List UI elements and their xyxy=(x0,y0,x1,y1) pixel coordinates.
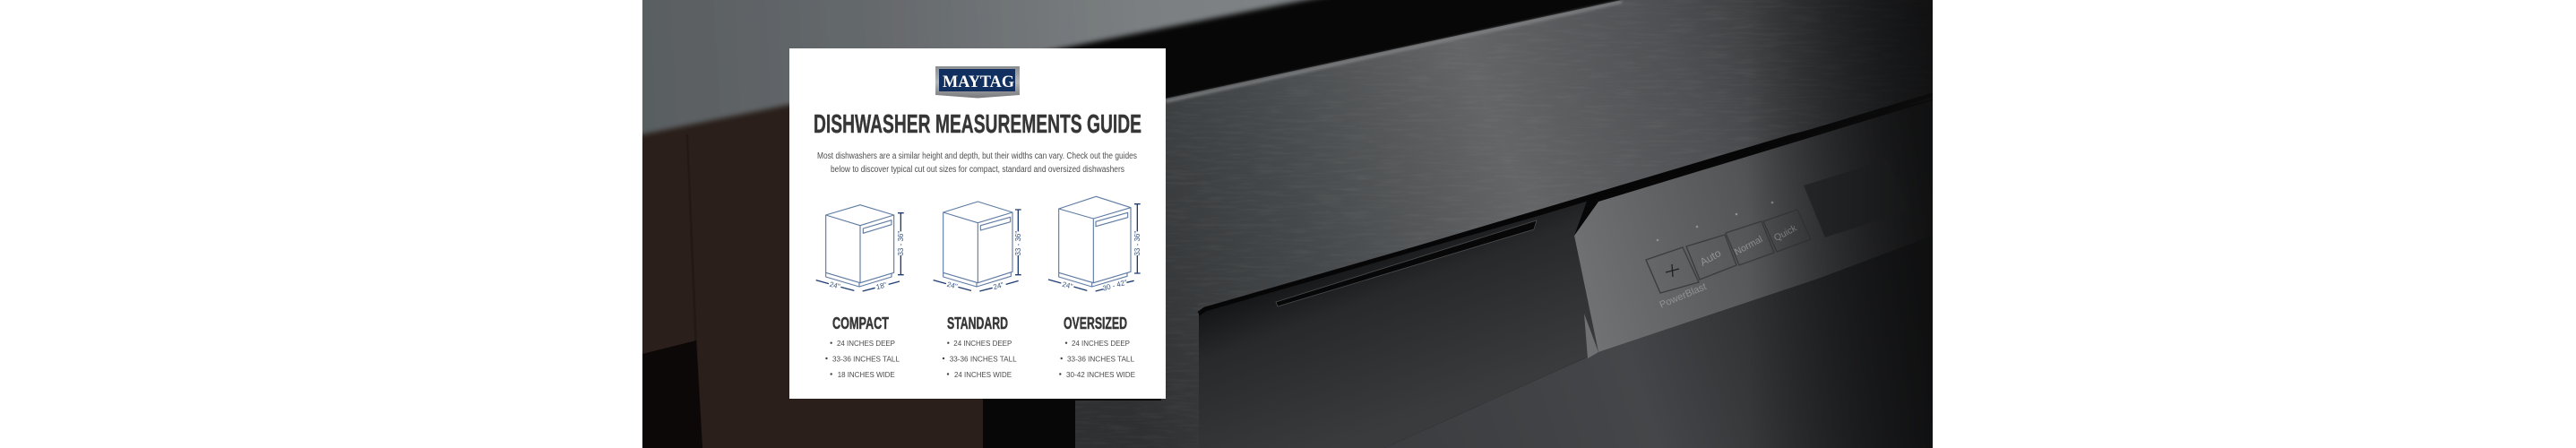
diagram: compact dishwasher xyxy=(816,205,905,291)
diagram: standard dishwasher: 24" xyxy=(946,280,959,290)
heading: oversized: OVERSIZED xyxy=(1064,314,1127,332)
diagram: oversized dishwasher xyxy=(1048,196,1142,293)
intro text xyxy=(817,151,1137,175)
heading: standard: STANDARD xyxy=(947,314,1008,332)
button: Normal xyxy=(1726,221,1774,265)
dark door face xyxy=(1199,199,1598,448)
photo: dishwasher background xyxy=(618,0,1933,448)
indicator lights xyxy=(1657,202,1773,241)
list: compact specs xyxy=(825,339,900,379)
list: oversized specs: 33-36 INCHES TALL xyxy=(1067,354,1134,363)
diagram: standard dishwasher: 33 - 36" xyxy=(1014,231,1022,256)
button: Quick xyxy=(1763,210,1811,252)
intro text: Most dishwashers are a similar height and depth, but their widths can vary. Check out the guides xyxy=(817,151,1137,161)
list: oversized specs xyxy=(1059,339,1135,379)
diagram: compact dishwasher: 24" xyxy=(829,280,841,290)
button: Quick: Quick xyxy=(1772,222,1799,244)
list: standard specs: 24 INCHES WIDE xyxy=(954,370,1012,379)
column: compact xyxy=(825,314,900,379)
list: compact specs: 33-36 INCHES TALL xyxy=(832,354,900,363)
heading: compact: COMPACT xyxy=(832,314,889,332)
diagram: oversized dishwasher: 24" xyxy=(1061,280,1073,290)
steel front xyxy=(1066,0,1933,448)
button: Auto: Auto xyxy=(1698,246,1723,269)
diagram: standard dishwasher: 24" xyxy=(993,280,1004,291)
diagram: compact dishwasher: 33 - 36" xyxy=(897,231,905,256)
diagram: oversized dishwasher: 33 - 36" xyxy=(1133,231,1142,256)
list: compact specs: 18 INCHES WIDE xyxy=(838,370,895,379)
handle slot xyxy=(1276,220,1537,306)
button: Normal: Normal xyxy=(1733,234,1764,258)
list: standard specs: 24 INCHES DEEP xyxy=(953,339,1012,348)
intro text: below to discover typical cut out sizes for compact, standard and oversized dishwashers xyxy=(831,165,1124,175)
diagram: standard dishwasher xyxy=(934,202,1022,291)
button: Auto xyxy=(1686,235,1736,280)
diagram: oversized dishwasher: 30 - 42" xyxy=(1102,279,1128,293)
right edge fade xyxy=(1747,0,1933,448)
black door edge xyxy=(1199,95,1933,314)
grey wall xyxy=(642,0,1324,138)
panel: measurements guide card xyxy=(789,48,1166,399)
column: standard xyxy=(943,314,1017,379)
list: standard specs: 33-36 INCHES TALL xyxy=(950,354,1017,363)
list: oversized specs: 30-42 INCHES WIDE xyxy=(1066,370,1135,379)
diagram: compact dishwasher: 18" xyxy=(875,280,888,291)
door lower steel xyxy=(1385,251,1915,448)
list: oversized specs: 24 INCHES DEEP xyxy=(1072,339,1130,348)
display window xyxy=(1804,175,1848,237)
wood cabinet xyxy=(642,90,983,448)
title: DISHWASHER MEASUREMENTS GUIDE xyxy=(814,110,1142,139)
logo: Maytag xyxy=(935,66,1020,99)
list: standard specs xyxy=(943,339,1017,379)
button: PowerBlast xyxy=(1646,247,1699,293)
control panel xyxy=(1574,100,1933,358)
column: oversized xyxy=(1059,314,1135,379)
label: PowerBlast: PowerBlast xyxy=(1658,281,1708,311)
list: compact specs: 24 INCHES DEEP xyxy=(837,339,895,348)
logo: Maytag: MAYTAG xyxy=(943,73,1014,91)
